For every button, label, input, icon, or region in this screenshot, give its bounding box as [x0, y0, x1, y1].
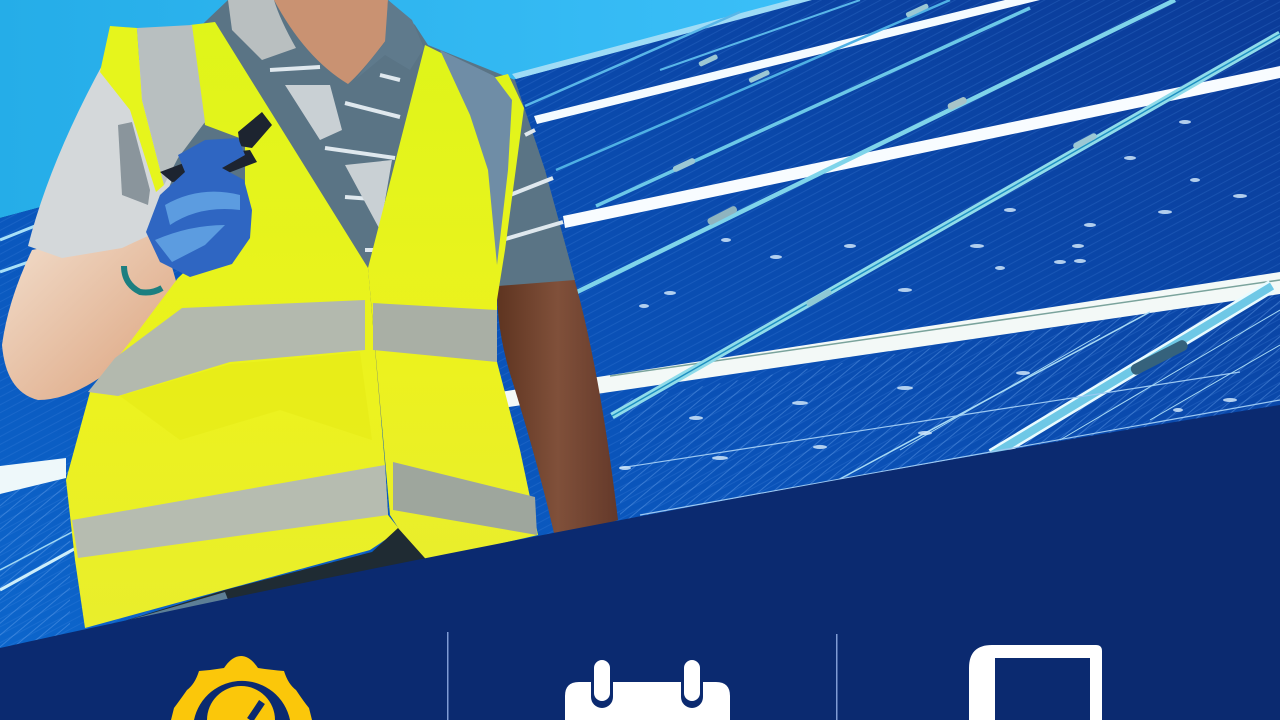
left sleeve, light [28, 60, 172, 258]
pliers [160, 112, 272, 182]
worker [2, 0, 618, 640]
trousers [108, 528, 432, 640]
pale sky-edge rail [512, 0, 812, 79]
lower right reflective stripe [393, 462, 537, 535]
right collar [355, 0, 424, 80]
vest left shoulder sliver [100, 26, 164, 192]
vest left panel [66, 22, 400, 628]
right shoulder strap [440, 50, 512, 265]
upper right reflective stripe [373, 303, 497, 362]
right arm [497, 278, 618, 542]
divider left [447, 632, 448, 720]
left collar [228, 0, 296, 60]
lower left reflective stripe [72, 465, 388, 558]
navy footer [0, 405, 1280, 720]
icon: calendar [565, 660, 730, 720]
neck [274, 0, 388, 84]
white rail 3 [500, 272, 1280, 408]
left arm [2, 225, 180, 400]
divider right [836, 634, 838, 720]
wristband [124, 266, 162, 292]
glove [146, 138, 252, 277]
cell highlights [619, 120, 1247, 517]
sleeve shadow [118, 122, 150, 205]
placket light patch [285, 85, 392, 230]
vest shading [120, 352, 372, 440]
upper left reflective stripe [88, 300, 365, 396]
left shoulder strap [137, 25, 205, 185]
white rail 2 [563, 66, 1280, 228]
shirt stripes [270, 67, 563, 250]
vest right panel [368, 45, 538, 562]
icon: tablet [969, 645, 1102, 720]
white rail 1 [534, 0, 1040, 124]
icon: gold badge [171, 656, 312, 720]
shirt body [160, 0, 575, 420]
rail clamps [672, 3, 1189, 376]
sky [0, 0, 810, 218]
white rail left [0, 458, 66, 494]
